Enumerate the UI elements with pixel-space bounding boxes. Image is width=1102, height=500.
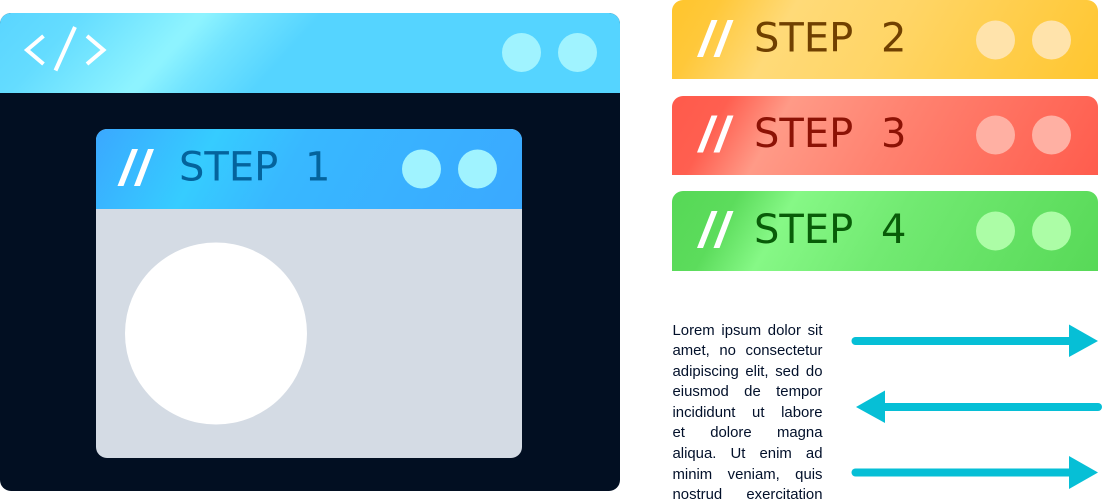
main window buttons xyxy=(502,33,597,72)
step 4 buttons xyxy=(976,212,1071,250)
icon: step 2 slashes xyxy=(697,20,734,57)
step 4 label: 4 xyxy=(881,207,906,253)
arrow: bottom right-pointing xyxy=(852,456,1098,489)
step 2 label: 2 xyxy=(881,16,906,62)
icon: step 4 slashes xyxy=(697,211,734,248)
panel: step 4 bar xyxy=(672,191,1098,271)
text block: lorem ipsum: incididunt ut labore xyxy=(672,405,822,421)
step 2 buttons xyxy=(976,20,1071,60)
step 3 label: 3 xyxy=(881,111,906,157)
panel: main browser window xyxy=(0,13,620,491)
arrow: top right-pointing xyxy=(852,324,1098,357)
panel: step 2 bar xyxy=(672,0,1098,79)
step 1 label: STEP xyxy=(179,144,278,190)
step 3 label: STEP xyxy=(754,111,853,157)
text block: lorem ipsum xyxy=(672,322,823,500)
text block: lorem ipsum: eiusmod de tempor xyxy=(672,384,822,400)
text block: lorem ipsum: aliqua. Ut enim ad xyxy=(672,446,822,462)
step 4 label: STEP xyxy=(754,207,853,253)
step 1 label: 1 xyxy=(305,144,330,190)
text block: lorem ipsum: minim veniam, quis xyxy=(672,467,822,483)
icon: step 1 slashes xyxy=(118,149,154,186)
panel: step 1 window xyxy=(96,129,522,458)
white circle placeholder xyxy=(125,242,307,424)
icon: step 3 slashes xyxy=(697,116,734,152)
arrow: middle left-pointing xyxy=(856,390,1102,423)
text block: lorem ipsum: Lorem ipsum dolor sit xyxy=(672,322,822,338)
step 3 buttons xyxy=(976,116,1071,154)
main window title bar xyxy=(0,13,620,93)
text block: lorem ipsum: amet, no consectetur xyxy=(672,343,822,359)
text block: lorem ipsum: et dolore magna xyxy=(672,425,822,441)
step 2 label: STEP xyxy=(754,16,853,62)
text block: lorem ipsum: adipiscing elit, sed do xyxy=(672,364,822,380)
step 1 buttons xyxy=(402,150,497,188)
icon: code brackets xyxy=(27,27,104,70)
panel: step 3 bar xyxy=(672,96,1098,175)
